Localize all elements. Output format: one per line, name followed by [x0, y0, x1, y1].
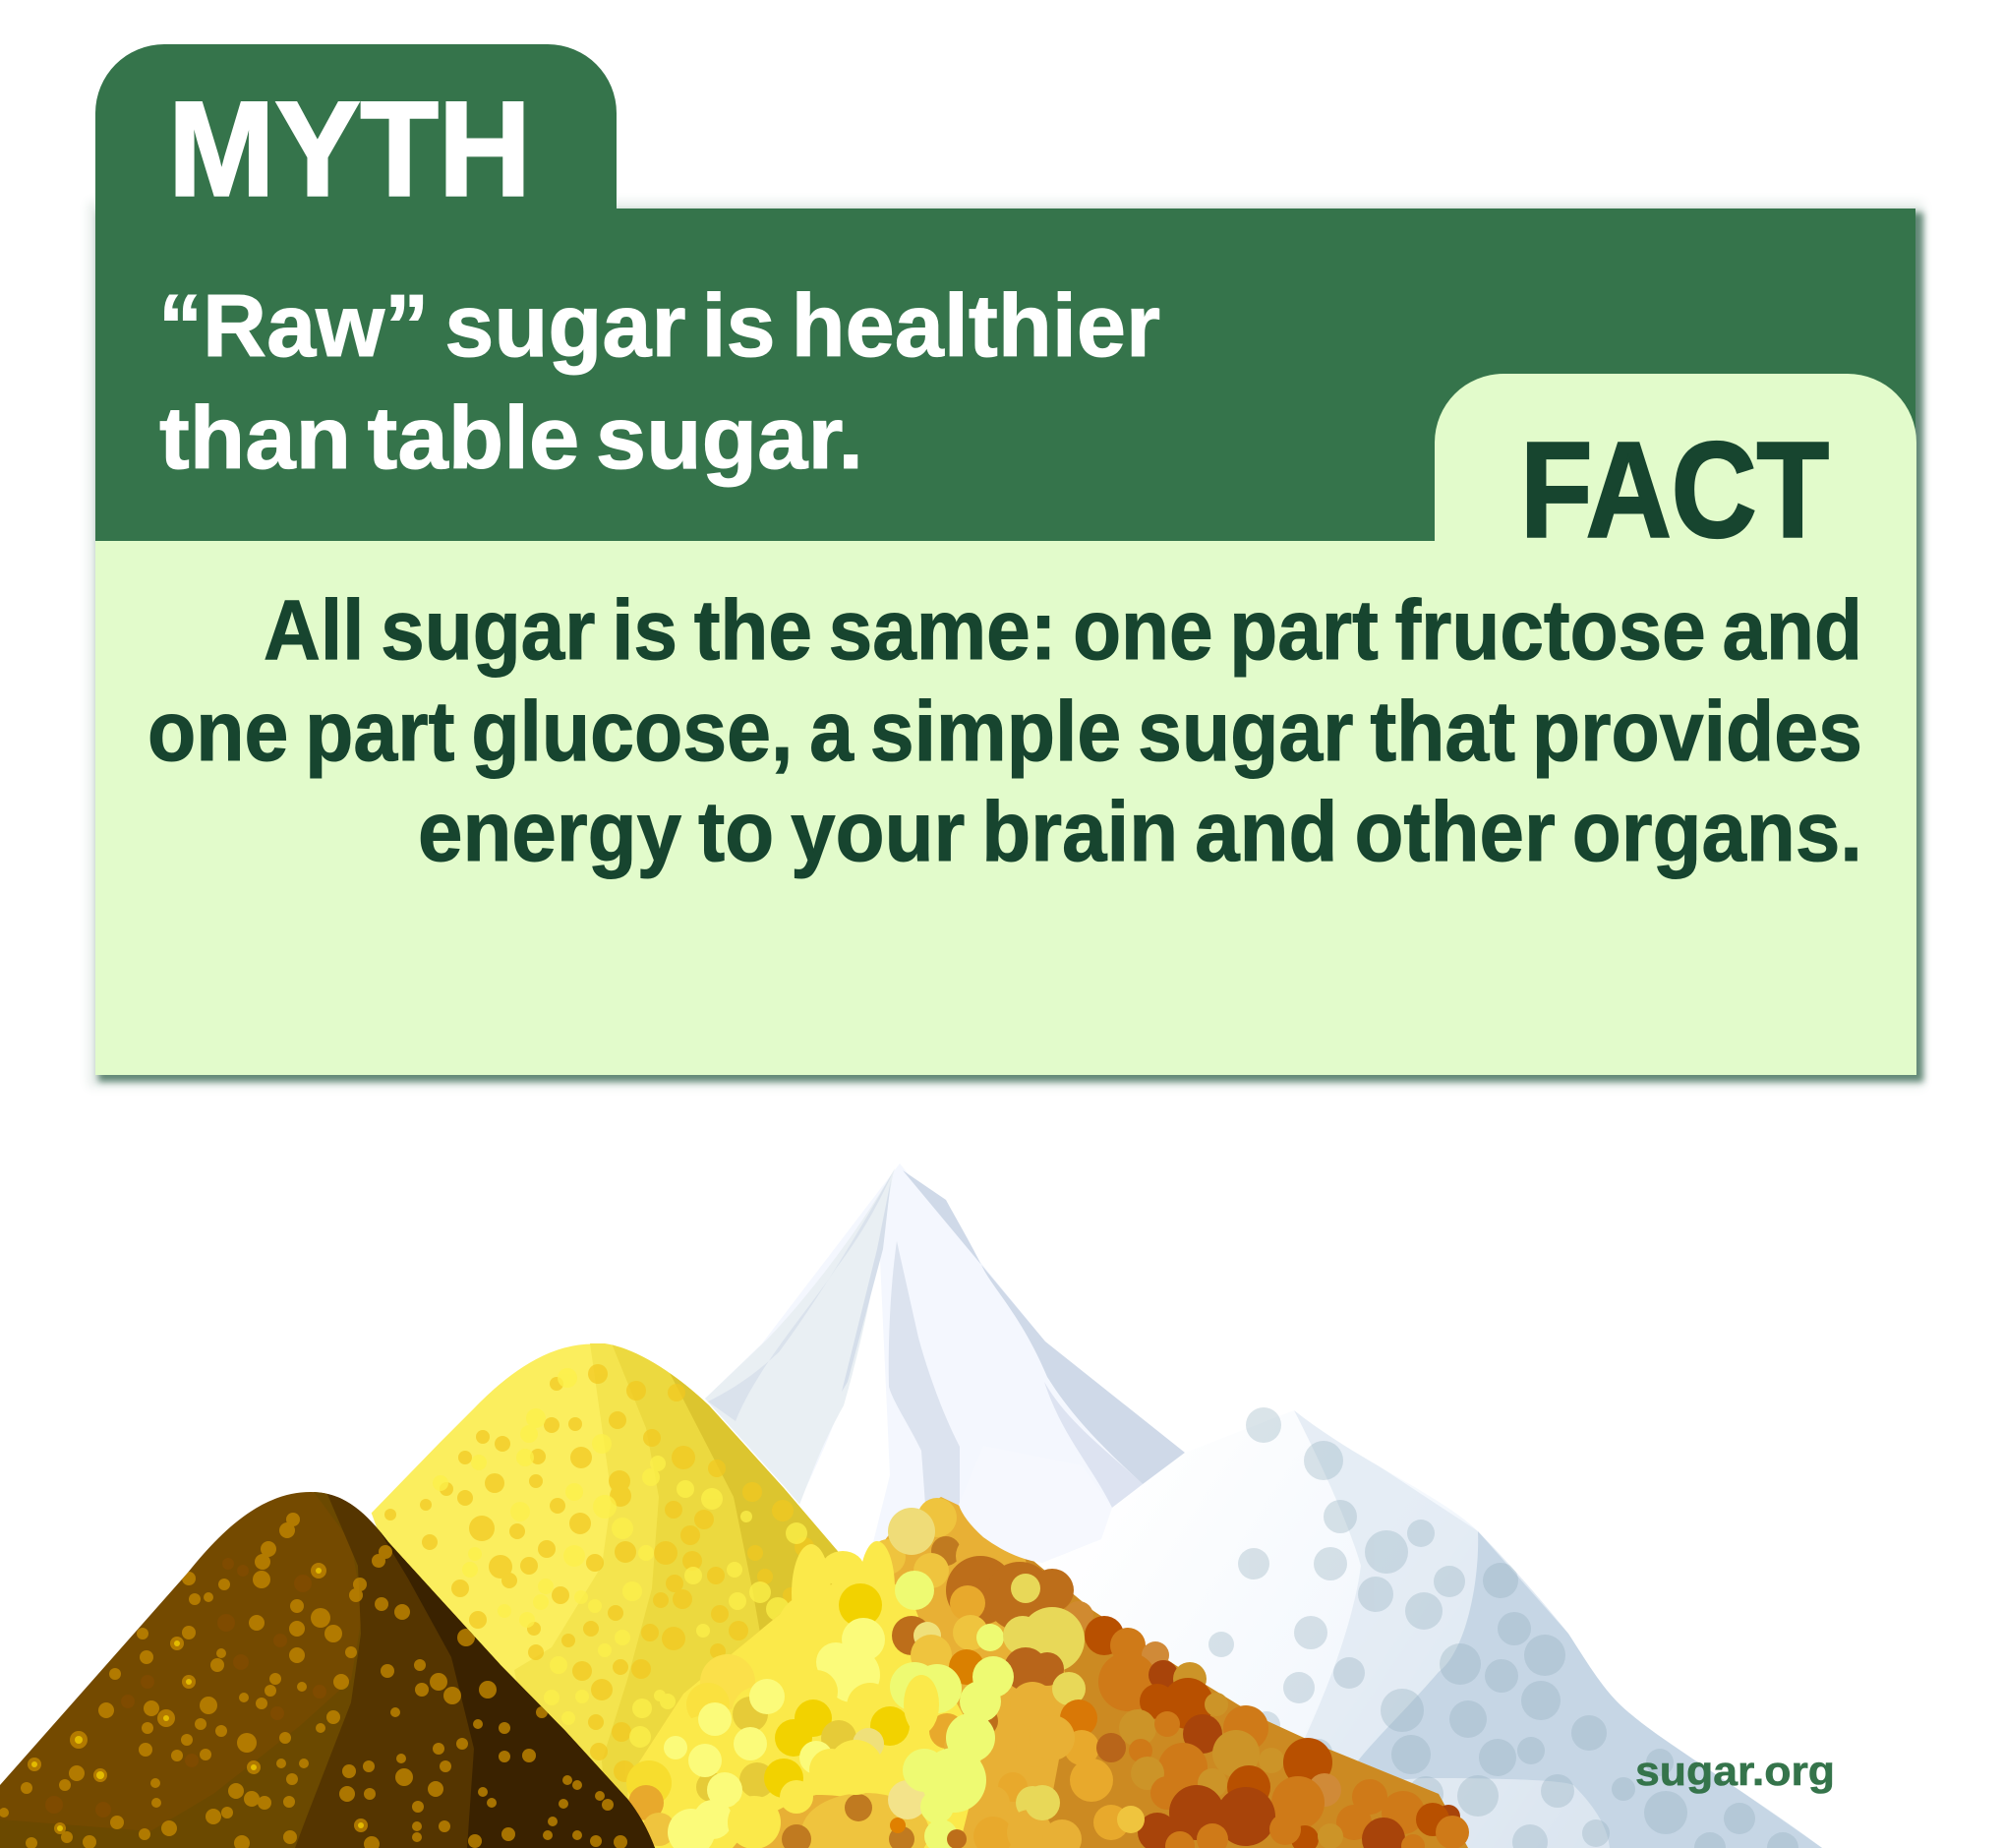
heading: MYTH: MYTH	[168, 75, 531, 224]
illustration: sugar piles	[0, 1163, 1822, 1848]
fact statement: energy to your brain and other organs.	[418, 785, 1862, 879]
source label: sugar.org	[1635, 1748, 1835, 1794]
myth panel	[95, 209, 1915, 543]
yellow sugar pile	[372, 1343, 838, 1800]
white sugar bag peak	[705, 1163, 1185, 1574]
white sugar pile	[964, 1407, 1822, 1848]
fact panel	[95, 541, 1916, 1075]
fact statement: one part glucose, a simple sugar that provides	[147, 685, 1862, 779]
fact tab	[1435, 374, 1916, 543]
fact statement	[147, 583, 1862, 879]
brown sugar pile	[0, 1492, 688, 1848]
myth statement	[158, 277, 1160, 488]
myth tab	[95, 44, 617, 236]
mixed golden grain pile	[626, 1446, 1469, 1848]
fact statement: All sugar is the same: one part fructose and	[264, 583, 1862, 678]
myth statement: than table sugar.	[159, 389, 863, 488]
myth statement: “Raw” sugar is healthier	[158, 277, 1160, 376]
panel: myth and fact card	[88, 44, 1923, 1087]
heading: FACT: FACT	[1520, 415, 1829, 566]
